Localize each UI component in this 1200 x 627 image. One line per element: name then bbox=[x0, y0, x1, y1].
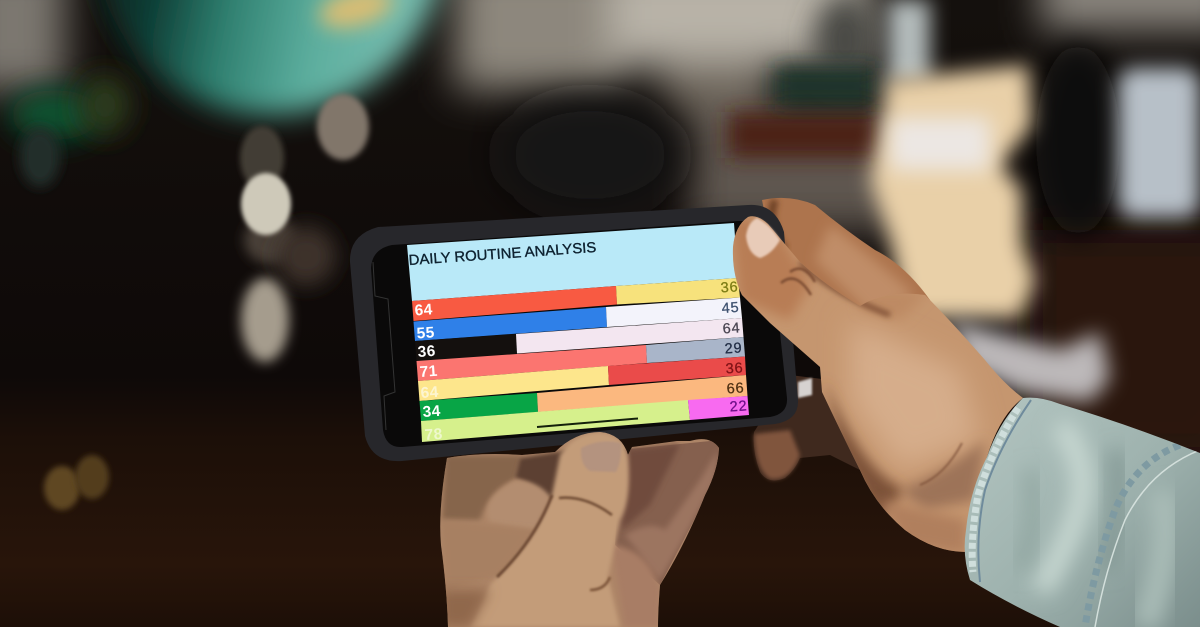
right hand lower fingers behind phone bbox=[754, 375, 860, 480]
phone case bbox=[350, 205, 798, 461]
row 7 bars: 22 bbox=[729, 398, 748, 415]
smartphone bbox=[350, 205, 798, 461]
row 7 bars: 78 bbox=[424, 426, 443, 444]
chart screen bbox=[407, 223, 749, 444]
thumb and palm bbox=[470, 432, 629, 627]
row 4 bars bbox=[416, 337, 745, 381]
row 6 bars: 34 bbox=[422, 403, 441, 421]
row 5 bars: 64 bbox=[420, 384, 439, 402]
upper fist finger bbox=[442, 455, 522, 520]
row 2 bars bbox=[414, 298, 742, 342]
row 5 bars bbox=[418, 356, 746, 402]
bottom hand bbox=[440, 432, 720, 627]
title: DAILY ROUTINE ANALYSIS bbox=[408, 240, 597, 269]
row 2 bars: 45 bbox=[721, 300, 740, 317]
right hand thumb and palm bbox=[730, 215, 1023, 555]
denim sleeve bbox=[965, 398, 1200, 627]
phone display bezel bbox=[371, 221, 787, 447]
right hand index finger behind phone bbox=[762, 198, 930, 306]
screen header background bbox=[407, 223, 738, 301]
globe bbox=[95, 0, 445, 115]
row 7 bars bbox=[421, 396, 749, 444]
row 2 bars: 55 bbox=[416, 324, 435, 342]
home indicator bbox=[537, 418, 638, 427]
row 1 bars bbox=[412, 278, 740, 321]
row 3 bars bbox=[415, 318, 744, 361]
row 1 bars: 64 bbox=[414, 301, 433, 319]
row 1 bars: 36 bbox=[720, 279, 739, 296]
screen notch outline bbox=[373, 262, 395, 430]
row 5 bars: 36 bbox=[725, 360, 744, 377]
row 4 bars: 29 bbox=[724, 340, 743, 357]
bokeh lights bbox=[10, 75, 369, 510]
thumbnail bbox=[746, 218, 780, 258]
row 6 bars: 66 bbox=[726, 380, 745, 397]
row 3 bars: 36 bbox=[417, 343, 436, 361]
books and shelf objects bbox=[728, 0, 1200, 402]
row 6 bars bbox=[420, 375, 748, 421]
shaded fingers behind thumb bbox=[615, 440, 720, 585]
row 3 bars: 64 bbox=[722, 320, 741, 337]
row 4 bars: 71 bbox=[419, 363, 438, 381]
thumbnail bbox=[581, 441, 621, 472]
